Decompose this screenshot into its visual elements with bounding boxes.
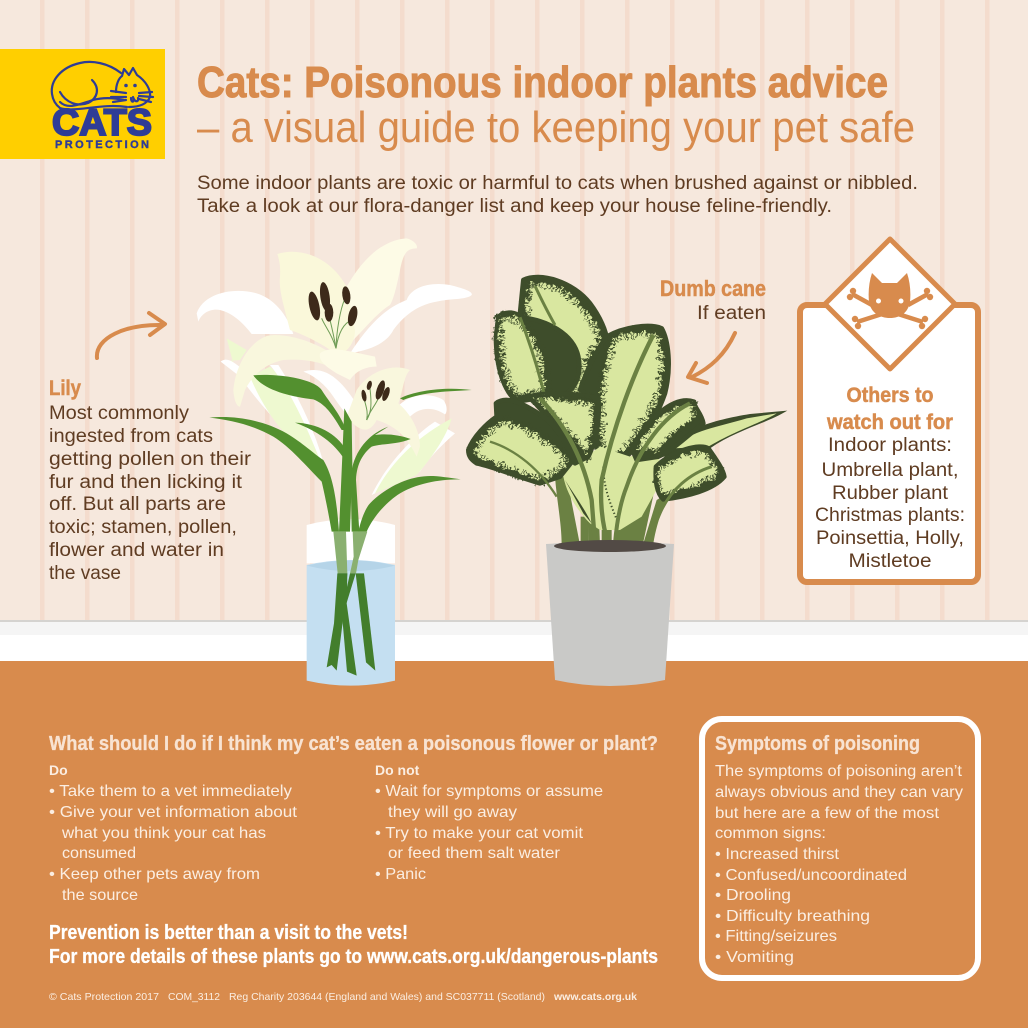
panel: symptoms of poisoning: • Drooling	[715, 887, 791, 904]
leaf: middle left	[528, 394, 599, 463]
do not list	[375, 762, 603, 883]
warning diamond	[825, 239, 955, 369]
leaf: top	[520, 277, 607, 397]
stems	[555, 447, 673, 545]
logo: Cats Protection	[0, 49, 165, 159]
do not list: • Wait for symptoms or assume	[375, 783, 603, 800]
lily text: getting pollen on their	[49, 449, 252, 470]
prevention message	[49, 922, 658, 968]
do not list: Do not	[375, 762, 420, 778]
lily text: Most commonly	[49, 403, 190, 424]
vase glass	[307, 519, 395, 563]
lily text: toxic; stamen, pollen,	[49, 517, 237, 538]
intro text	[197, 173, 918, 217]
prevention message: For more details of these plants go to www.cats.org.uk/dangerous-plants	[49, 946, 658, 968]
title: Cats: Poisonous indoor plants advice	[197, 58, 888, 107]
lily text: flower and water in	[49, 540, 224, 561]
lily text: Lily	[49, 377, 81, 400]
panel: symptoms of poisoning: but here are a few of the most	[715, 805, 940, 822]
leaf: lower left	[468, 400, 573, 483]
dumb cane plant	[468, 277, 787, 545]
do not list: or feed them salt water	[388, 845, 561, 862]
dumb cane label: If eaten	[697, 303, 766, 324]
leaf: right long	[660, 411, 787, 457]
others text: Indoor plants:	[828, 435, 952, 456]
panel: symptoms of poisoning: Symptoms of poisoning	[715, 733, 920, 755]
others text: Mistletoe	[848, 551, 932, 572]
lily text	[49, 377, 252, 584]
do list: • Give your vet information about	[49, 804, 298, 821]
others text: Umbrella plant,	[822, 460, 958, 481]
footer: Reg Charity 203644 (England and Wales) and SC037711 (Scotland)	[229, 991, 545, 1003]
others text: Poinsettia, Holly,	[816, 528, 964, 549]
others text: Rubber plant	[832, 483, 949, 504]
arrow: lily	[97, 313, 165, 358]
intro text: Take a look at our flora-danger list and keep your house feline-friendly.	[197, 196, 832, 217]
panel: others to watch out for	[800, 239, 978, 582]
panel: symptoms of poisoning: • Vomiting	[715, 949, 794, 966]
what to do heading: What should I do if I think my cat’s eaten a poisonous flower or plant?	[49, 733, 658, 755]
leaves and stems	[209, 375, 472, 532]
others text: Christmas plants:	[815, 505, 965, 526]
icon: cat and crossbones	[847, 273, 933, 329]
title: – a visual guide to keeping your pet safe	[197, 103, 915, 152]
logo: Cats Protection: PROTECTION	[55, 139, 149, 151]
panel: symptoms of poisoning: • Difficulty breathing	[715, 908, 870, 925]
logo: Cats Protection: CATS	[52, 102, 152, 143]
lily text: ingested from cats	[49, 426, 213, 447]
do list: what you think your cat has	[61, 825, 266, 842]
lily plant in vase	[197, 238, 472, 686]
footer	[49, 991, 637, 1003]
do not list: • Panic	[375, 866, 426, 883]
leaf: centre	[580, 326, 669, 467]
lily petals	[197, 238, 472, 495]
prevention message: Prevention is better than a visit to the vets!	[49, 922, 408, 944]
do list: Do	[49, 762, 68, 778]
stamens	[306, 281, 391, 420]
others text: watch out for	[826, 411, 953, 434]
lily text: the vase	[49, 563, 121, 584]
footer: COM_3112	[168, 991, 220, 1003]
panel: symptoms of poisoning: always obvious and they can vary	[715, 784, 963, 801]
dumb cane label	[660, 276, 766, 324]
others text	[815, 384, 965, 572]
footer: © Cats Protection 2017	[49, 991, 159, 1003]
do not list: they will go away	[388, 804, 517, 821]
leaf: right middle	[632, 401, 703, 460]
do list: the source	[62, 887, 138, 904]
panel: symptoms of poisoning: • Fitting/seizures	[715, 928, 837, 945]
panel: symptoms of poisoning: • Increased thirst	[715, 846, 840, 863]
lily text: fur and then licking it	[49, 472, 243, 493]
panel: symptoms of poisoning	[702, 719, 978, 978]
leaf: upper left	[496, 313, 579, 402]
do list: consumed	[62, 845, 136, 862]
do list	[49, 762, 298, 904]
panel: symptoms of poisoning: • Confused/uncoordinated	[715, 867, 907, 884]
lily text: off. But all parts are	[49, 494, 226, 515]
do list: • Take them to a vet immediately	[49, 783, 292, 800]
lower centre panel	[563, 447, 660, 530]
water	[307, 560, 395, 686]
do list: • Keep other pets away from	[49, 866, 260, 883]
panel: symptoms of poisoning: The symptoms of poisoning aren’t	[715, 763, 963, 780]
leaf: lower right	[656, 447, 724, 499]
others text: Others to	[846, 384, 934, 407]
footer: www.cats.org.uk	[553, 991, 637, 1003]
panel: symptoms of poisoning: common signs:	[715, 825, 826, 842]
intro text: Some indoor plants are toxic or harmful to cats when brushed against or nibbled.	[197, 173, 918, 194]
stems in water	[307, 532, 395, 686]
do not list: • Try to make your cat vomit	[375, 825, 584, 842]
title	[197, 58, 915, 152]
dumb cane label: Dumb cane	[660, 276, 766, 301]
plant pot	[546, 540, 674, 686]
arrow: dumb cane	[688, 333, 735, 383]
